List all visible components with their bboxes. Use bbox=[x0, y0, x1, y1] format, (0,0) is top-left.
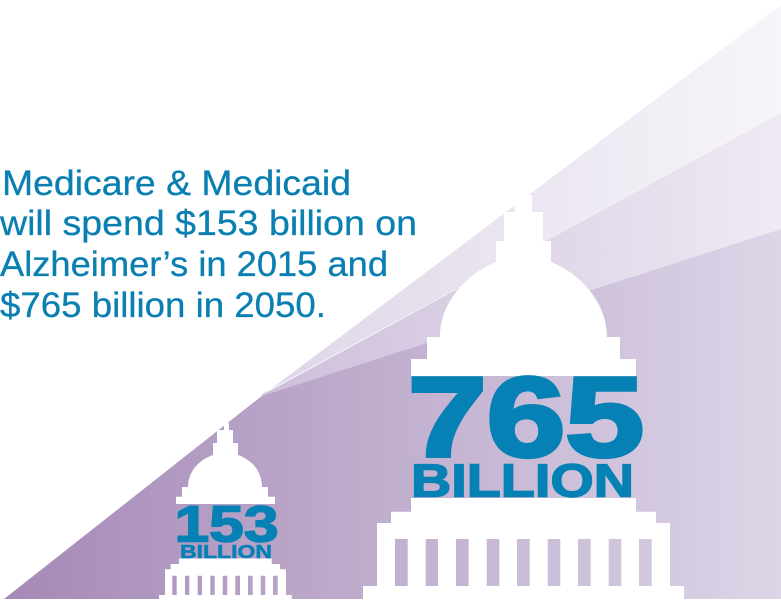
large capitol base with columns bbox=[363, 498, 684, 599]
text block: headline statement: $765 billion in 2050. bbox=[0, 286, 326, 325]
icon: small capitol building with 153 billion bbox=[159, 423, 292, 599]
small capitol dome bbox=[176, 423, 275, 504]
small capitol base with columns bbox=[159, 558, 292, 599]
large capitol dome bbox=[411, 195, 636, 376]
text block: headline statement: Alzheimer’s in 2015 and bbox=[0, 245, 388, 284]
text block: headline statement: Medicare & Medicaid bbox=[2, 164, 351, 203]
text block: headline statement: will spend $153 billion on bbox=[0, 204, 417, 243]
value: 153: 153 bbox=[174, 496, 278, 552]
text block: headline statement bbox=[0, 164, 417, 325]
background: light outer beam bbox=[262, 5, 781, 396]
label: BILLION: BILLION bbox=[180, 542, 272, 562]
icon: large capitol building with 765 billion bbox=[363, 195, 684, 599]
label: BILLION: BILLION bbox=[411, 454, 634, 506]
background: dark lower purple area bbox=[4, 229, 781, 599]
background: middle beam bbox=[262, 113, 781, 396]
value: 765: 765 bbox=[408, 354, 644, 480]
